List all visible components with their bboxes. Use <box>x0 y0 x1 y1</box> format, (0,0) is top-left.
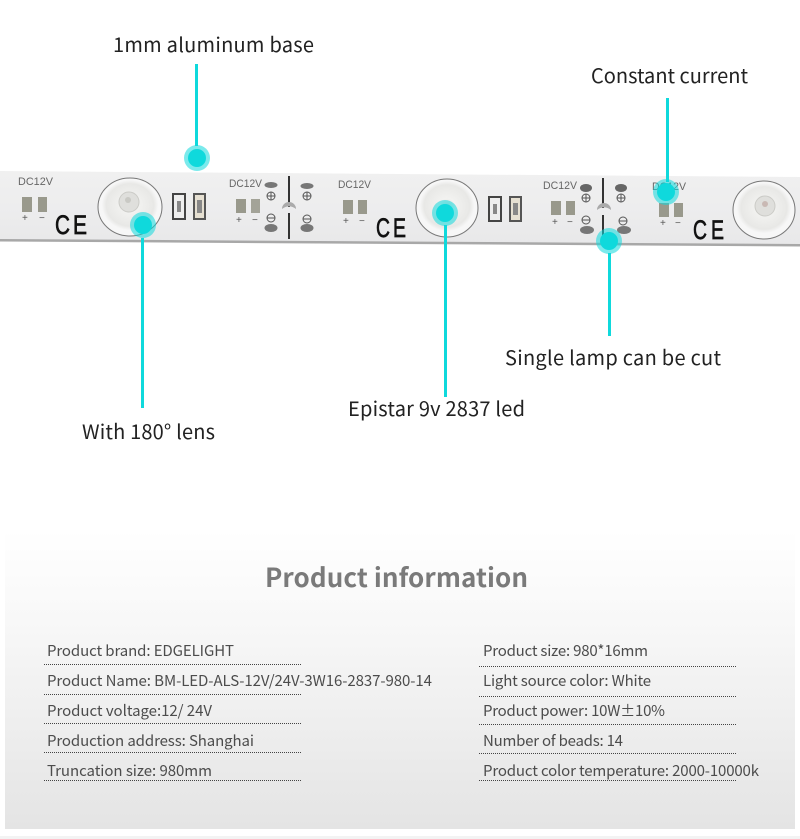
callout: Epistar 9v 2837 led: Epistar 9v 2837 led <box>348 393 525 422</box>
strip segment 1: lens and markings: C <box>55 210 70 240</box>
strip segment 2: cut mark and markings: DC12V <box>229 178 263 190</box>
strip segment 3: lens and markings <box>338 179 521 243</box>
strip segment 2: cut mark and markings: + <box>236 215 242 226</box>
spec list: right column: Product size: 980*16mm <box>483 640 648 661</box>
spec list: left column: Product voltage:12/ 24V <box>47 700 212 721</box>
strip segment 4: cut mark and markings: + <box>552 217 558 228</box>
strip segment 1: lens and markings <box>18 176 205 240</box>
spec list: right column: Product color temperature: 2000-10000k <box>483 760 760 781</box>
strip segment 4: cut mark and markings: DC12V <box>543 180 578 192</box>
heading: Product information <box>265 558 528 595</box>
strip segment 2: cut mark and markings: − <box>252 215 258 226</box>
strip segment 5: lens and markings: E <box>711 215 724 245</box>
strip segment 3: lens and markings: E <box>393 213 406 243</box>
strip segment 3: lens and markings: − <box>359 216 365 227</box>
strip segment 5: lens and markings <box>652 181 795 245</box>
strip segment 4: cut mark and markings: − <box>567 217 573 228</box>
strip segment 5: lens and markings: − <box>675 218 681 229</box>
callout: constant current: Constant current <box>591 60 748 89</box>
strip segment 3: lens and markings: C <box>376 213 390 243</box>
spec list: left column: Truncation size: 980mm <box>47 760 212 781</box>
spec list: right column: Light source color: White <box>483 670 651 691</box>
callout: 1mm aluminum base <box>113 29 314 171</box>
callout: with 180 degree lens <box>82 212 215 445</box>
strip segment 1: lens and markings: DC12V <box>18 176 54 188</box>
spec list: left column: Product Name: BM-LED-ALS-12V/24V-3W16-2837-980-14 <box>47 670 432 691</box>
callout: Epistar 9v 2837 led <box>348 200 525 422</box>
strip segment 4: cut mark and markings <box>543 178 631 241</box>
strip segment 5: lens and markings: + <box>660 218 666 229</box>
strip segment 3: lens and markings: DC12V <box>338 179 372 191</box>
LED strip <box>0 171 800 246</box>
callout: constant current <box>591 60 748 205</box>
spec list: right column: Number of beads: 14 <box>483 730 623 751</box>
strip segment 2: cut mark and markings <box>229 176 314 239</box>
spec list: left column: Product brand: EDGELIGHT <box>47 640 234 661</box>
spec list: right column: Product power: 10W±10% <box>483 700 665 721</box>
strip segment 1: lens and markings: − <box>39 213 45 224</box>
strip segment 1: lens and markings: + <box>22 213 28 224</box>
spec list: left column <box>44 640 432 781</box>
spec list: left column: Production address: Shanghai <box>47 730 254 751</box>
callout: single lamp can be cut: Single lamp can be cut <box>505 342 721 371</box>
callout: single lamp can be cut <box>505 228 721 371</box>
panel: product information <box>0 530 800 839</box>
strip segment 1: lens and markings: E <box>73 210 87 240</box>
callout: with 180 degree lens: With 180° lens <box>82 416 215 445</box>
strip segment 3: lens and markings: + <box>343 216 349 227</box>
strip segment 5: lens and markings: DC12V <box>652 181 687 193</box>
strip segment 5: lens and markings: C <box>693 215 707 245</box>
spec list: right column <box>479 640 760 781</box>
callout: 1mm aluminum base: 1mm aluminum base <box>113 29 314 58</box>
